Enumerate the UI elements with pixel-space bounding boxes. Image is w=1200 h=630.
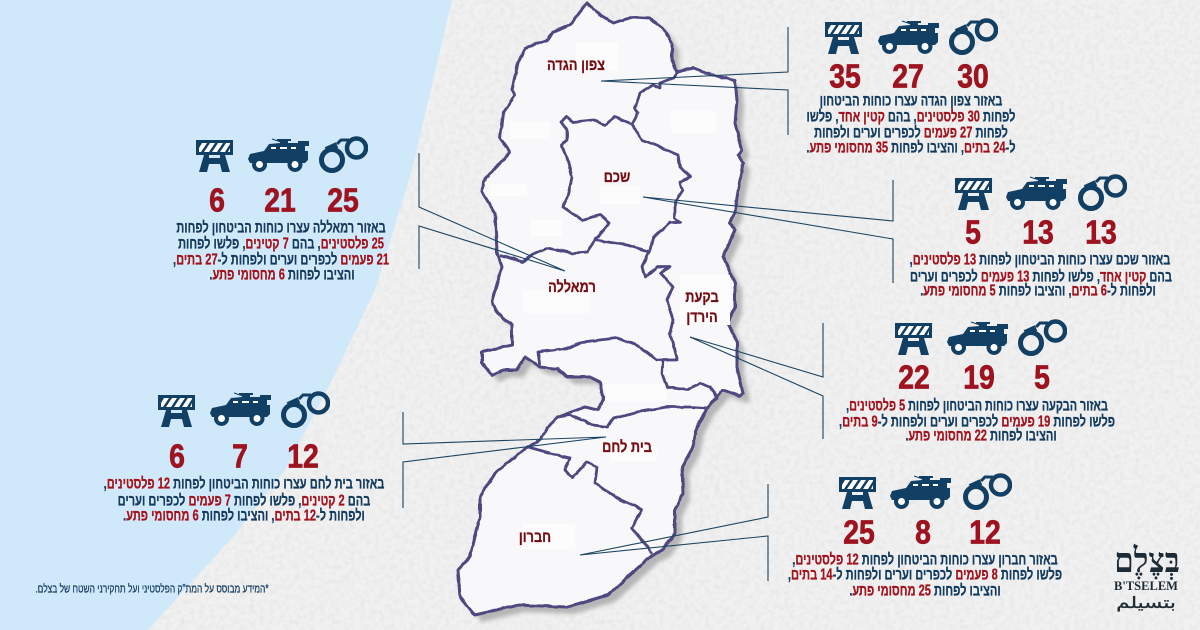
number: detained: 12 <box>969 514 1001 550</box>
logo hebrew: בְּצֶלֶם <box>1114 543 1180 580</box>
icon: handcuffs <box>963 473 1012 510</box>
number: detained: 30 <box>957 58 989 94</box>
panel: bethlehem <box>104 391 384 524</box>
icon: military jeep <box>1006 176 1067 210</box>
icon: military jeep <box>210 392 271 426</box>
text line 3: 21 פעמים לכפרים וערים ולפחות ל-27 בתים, <box>173 251 389 268</box>
icon: barrier <box>955 178 992 210</box>
text line 3: והציבו לפחות 25 מחסומי פתע. <box>849 582 1001 599</box>
icon: barrier <box>196 140 233 172</box>
leader lines <box>403 27 893 581</box>
text line 1: באזור הבקעה עצרו כוחות הביטחון לפחות 5 פלסטינים, <box>846 397 1108 414</box>
number: checkpoints: 6 <box>209 182 225 218</box>
panel: northern west bank <box>806 18 1016 156</box>
panel: nablus <box>910 174 1172 299</box>
label: ramallah: רמאללה <box>548 279 596 296</box>
icon: handcuffs <box>949 18 998 55</box>
icon: barrier <box>825 22 862 54</box>
number: raids: 7 <box>232 438 248 474</box>
text line 3: ולפחות ל-6 בתים, והציבו לפחות 5 מחסומי פתע. <box>920 282 1156 299</box>
icon: military jeep <box>890 476 951 509</box>
icon: military jeep <box>248 138 309 172</box>
text line 2: בהם 2 קטינים, פלשו לפחות 7 פעמים לכפרים וערים <box>118 492 370 509</box>
panel: ramallah <box>173 136 389 283</box>
text line 1: באזור צפון הגדה עצרו כוחות הביטחון <box>820 92 1002 109</box>
text line 1: באזור חברון עצרו כוחות הביטחון לפחות 12 פלסטינים, <box>792 551 1058 568</box>
text line 1: באזור שכם עצרו כוחות הביטחון לפחות 13 פלסטינים, <box>910 251 1170 268</box>
label: jordan valley line 1: בקעת <box>685 289 719 306</box>
number: raids: 27 <box>892 58 924 94</box>
leader: jordan valley <box>690 323 823 439</box>
number: checkpoints: 5 <box>965 214 981 250</box>
number: detained: 25 <box>327 182 359 218</box>
number: detained: 13 <box>1085 214 1117 250</box>
text line 3: ולפחות ל-12 בתים, והציבו לפחות 6 מחסומי פתע. <box>123 507 365 524</box>
icon: barrier <box>158 395 195 427</box>
text line 3: והציבו לפחות 22 מחסומי פתע. <box>905 427 1057 444</box>
number: raids: 8 <box>915 514 931 550</box>
logo: B'Tselem <box>1110 543 1182 613</box>
text line 3: לפחות 27 פעמים לכפרים וערים ולפחות <box>814 124 1008 141</box>
label: bethlehem: בית לחם <box>602 439 652 456</box>
label: hebron: חברון <box>519 529 551 546</box>
icon: military jeep <box>878 20 939 54</box>
text line 4: והציבו לפחות 6 מחסומי פתע. <box>209 266 355 283</box>
text line 2: לפחות 30 פלסטינים, בהם קטין אחד, פלשו <box>807 108 1015 125</box>
text line 1: באזור רמאללה עצרו כוחות הביטחון לפחות <box>176 219 386 236</box>
leader: nablus <box>643 180 893 283</box>
number: checkpoints: 22 <box>898 358 930 396</box>
number: raids: 19 <box>963 358 995 396</box>
number: detained: 12 <box>287 438 319 474</box>
icon: handcuffs <box>1078 174 1127 211</box>
panel: hebron <box>788 473 1062 599</box>
icon: military jeep <box>947 322 1008 355</box>
text line 2: פלשו לפחות 19 פעמים לכפרים וערים ולפחות ל-9 בתים, <box>839 413 1115 430</box>
number: raids: 13 <box>1022 214 1054 250</box>
number: raids: 21 <box>264 182 296 218</box>
map outline <box>458 3 743 615</box>
leader: hebron <box>580 484 768 581</box>
number: detained: 5 <box>1034 358 1050 396</box>
footnote: *המידע מבוסס על המת"ק הפלסטיני ועל תחקירני השטח של בצלם. <box>35 583 269 595</box>
text line 4: ל-24 בתים, והציבו לפחות 35 מחסומי פתע. <box>806 139 1016 156</box>
logo arabic: بتسيلم <box>1116 593 1176 612</box>
number: checkpoints: 25 <box>843 514 875 550</box>
number: checkpoints: 6 <box>169 438 185 474</box>
text line 2: 25 פלסטינים, בהם 7 קטינים, פלשו לפחות <box>178 235 384 252</box>
label: nablus: שכם <box>604 169 630 186</box>
text line 2: פלשו לפחות 8 פעמים לכפרים וערים ולפחות ל-14 בתים, <box>788 566 1062 583</box>
number: checkpoints: 35 <box>829 58 861 94</box>
text line 2: בהם קטין אחד, פלשו לפחות 13 פעמים לכפרים וערים <box>910 268 1172 285</box>
white label patches <box>490 43 730 549</box>
label: northern west bank: צפון הגדה <box>547 57 605 74</box>
map shadow <box>465 10 750 622</box>
leader: bethlehem <box>403 412 606 508</box>
panel: jordan valley <box>839 319 1115 444</box>
logo latin: B'TSELEM <box>1114 579 1178 593</box>
icon: barrier <box>895 323 932 355</box>
label: jordan valley line 2: הירדן <box>686 309 718 326</box>
icon: handcuffs <box>1018 319 1067 356</box>
internal district borders <box>500 72 717 553</box>
leader: ramallah <box>419 153 565 271</box>
icon: handcuffs <box>281 391 330 428</box>
text line 1: באזור בית לחם עצרו כוחות הביטחון לפחות 12 פלסטינים, <box>104 475 384 492</box>
leader: north <box>601 27 788 135</box>
icon: barrier <box>839 477 876 509</box>
icon: handcuffs <box>319 136 368 173</box>
